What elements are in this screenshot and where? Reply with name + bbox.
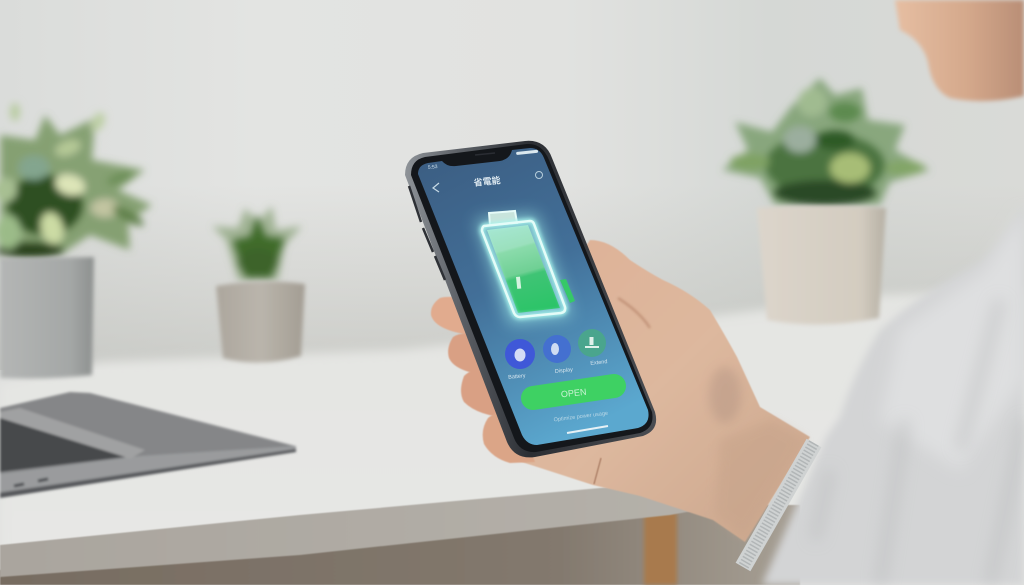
home indicator <box>567 426 608 433</box>
shirt folds <box>815 300 1024 585</box>
thumb crease <box>618 298 650 328</box>
shirt cuff <box>743 443 814 567</box>
wall background <box>0 0 1024 370</box>
leaf mass <box>0 115 152 255</box>
phone bezel <box>411 144 652 452</box>
laptop <box>0 392 296 498</box>
green button <box>533 386 614 399</box>
area under table <box>0 505 800 585</box>
table front edge <box>0 478 720 577</box>
battery side tab <box>560 279 575 303</box>
foliage <box>212 206 302 280</box>
status icons <box>516 150 538 155</box>
shirt highlight <box>880 210 1024 470</box>
light leaves <box>830 153 870 183</box>
battery icon <box>476 211 575 324</box>
battery glow <box>476 214 572 324</box>
battery fill <box>487 225 560 313</box>
screen title: 省電能 <box>473 174 501 188</box>
dark core <box>7 175 83 235</box>
label: Extend <box>590 359 608 367</box>
finger 1 <box>431 297 470 335</box>
dark base <box>773 180 877 206</box>
shirt body <box>762 205 1024 585</box>
foliage <box>0 103 152 258</box>
battery outline glow <box>482 221 565 317</box>
table leg <box>644 512 677 585</box>
small plant <box>212 206 305 363</box>
finger 3 <box>461 367 510 418</box>
phone <box>405 141 656 457</box>
pot <box>757 206 886 325</box>
palm and wrist <box>500 240 810 542</box>
status bar text: 5:53 <box>428 164 438 171</box>
left plant <box>0 103 152 379</box>
keyboard bezel strip <box>0 408 145 459</box>
phone body <box>405 141 656 457</box>
pot <box>0 257 94 379</box>
table surface <box>0 290 1024 585</box>
button text: OPEN <box>560 387 587 399</box>
action icon 2 <box>543 335 573 375</box>
label: Display <box>555 367 573 375</box>
palm crease <box>594 458 601 484</box>
leaf mass <box>722 78 930 205</box>
finger 2 <box>448 333 490 376</box>
battery cap <box>489 211 517 225</box>
ports <box>14 479 48 486</box>
hand shadow <box>709 367 741 423</box>
pot <box>216 281 305 363</box>
laptop body <box>0 392 296 497</box>
right plant <box>722 78 930 325</box>
side buttons <box>409 186 445 280</box>
action icon 3 <box>578 329 608 367</box>
front silver strip <box>0 446 296 492</box>
finger 4 <box>483 412 535 463</box>
notch speaker <box>475 153 495 155</box>
shirt <box>762 205 1024 585</box>
back arrow <box>433 183 439 192</box>
caption under button: Optimize power usage <box>553 411 608 423</box>
keyboard <box>0 418 125 472</box>
battery outline <box>482 221 565 317</box>
foliage <box>722 78 930 206</box>
laptop edge <box>0 449 296 498</box>
screen <box>418 148 649 445</box>
hand <box>431 240 810 542</box>
label: Battery <box>508 373 526 381</box>
person face <box>895 0 1024 101</box>
action icon 1 <box>505 339 535 381</box>
settings icon <box>536 172 542 178</box>
charge mark <box>516 277 521 289</box>
light leaves <box>53 171 87 199</box>
wrist shade <box>715 420 805 538</box>
